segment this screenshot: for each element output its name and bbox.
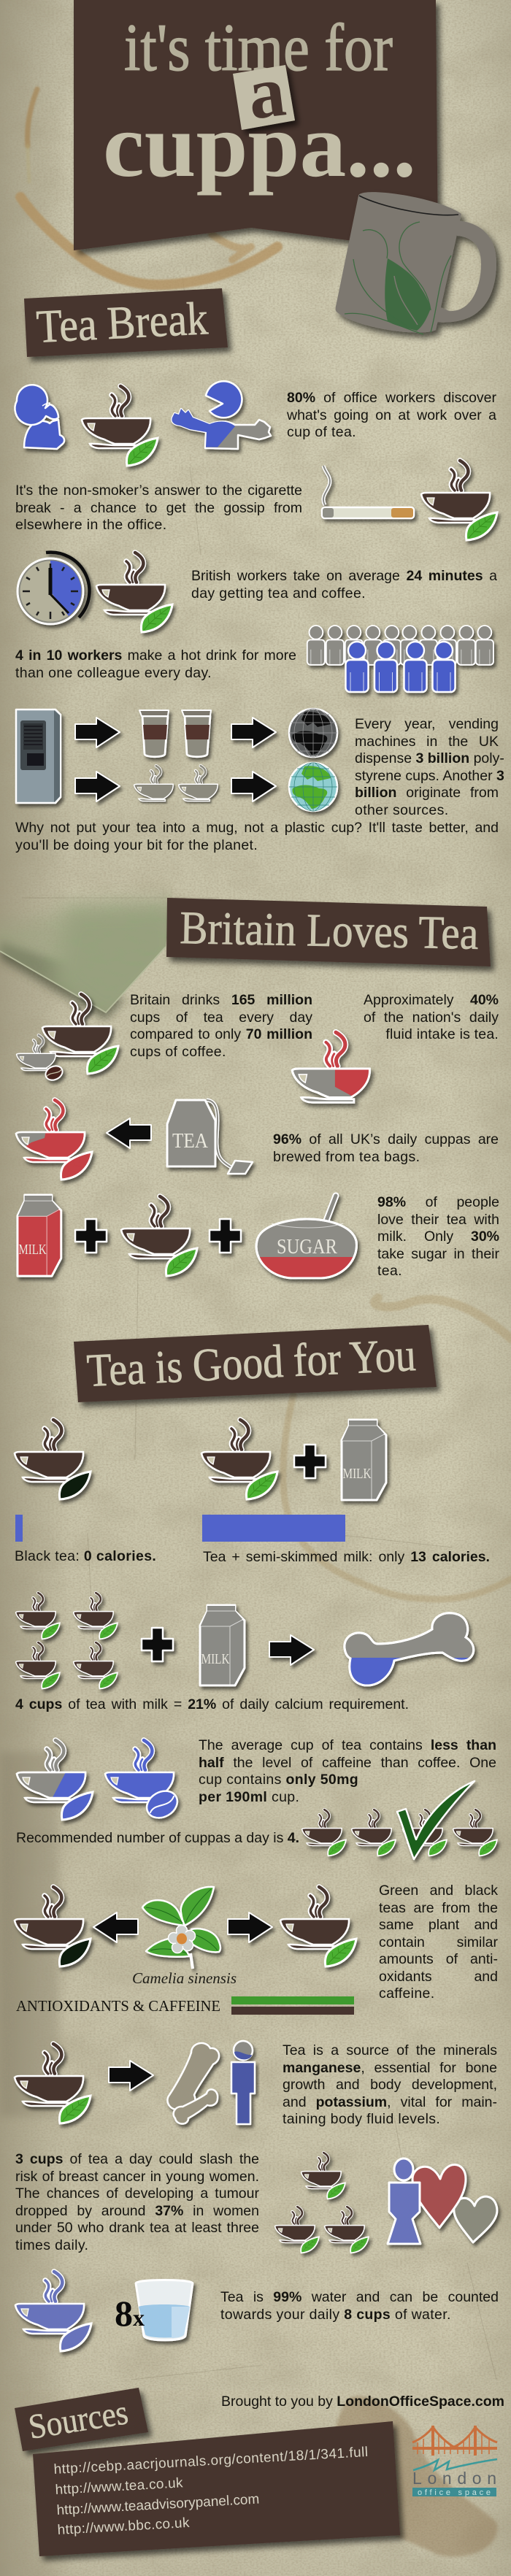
- heading banner: Tea Break: Tea Break: [35, 292, 209, 353]
- text: use a mug: Why not put your tea into a mug, not a plastic cup? It'll taste better, and: [15, 820, 499, 836]
- source url 2: http://www.tea.co.uk: [55, 2475, 184, 2498]
- text: breast cancer: dropped by around 37% in women: [15, 2203, 259, 2219]
- sources panel: [33, 2421, 400, 2556]
- logo: London Office Space: London: [412, 2469, 496, 2488]
- icon: listening colleague: [15, 385, 64, 449]
- text: non-smoker's answer: break - a chance to get the gossip from: [15, 499, 302, 515]
- text: 98 percent milk: love their tea with: [377, 1212, 499, 1228]
- text: green and black teas: same plant and: [379, 1917, 498, 1933]
- text: caffeine: [199, 1737, 496, 1804]
- icon: black tea cup: [15, 1420, 91, 1499]
- icon: woman and hearts: [388, 2158, 497, 2244]
- text: caffeine: The average cup of tea contains less than: [199, 1737, 496, 1753]
- text: 24 minutes: day getting tea and coffee.: [191, 585, 366, 601]
- icon: cup 40 percent red: [292, 1032, 374, 1102]
- title banner: [74, 0, 438, 252]
- text: breast cancer: under 50 who drank tea at least three: [15, 2220, 259, 2236]
- text: caffeine: half the level of caffeine than coffee. One: [199, 1755, 496, 1771]
- text: breast cancer: The chances of developing a tumour: [15, 2185, 259, 2202]
- icon: big tea cup vs small coffee: [17, 994, 118, 1083]
- text: 40 percent of fluid intake: Approximately 40%: [364, 992, 499, 1008]
- text: 165 million cups: Britain drinks 165 million: [130, 992, 312, 1008]
- text: use a mug: you'll be doing your bit for the planet.: [15, 837, 258, 853]
- icon: tea cup with milk: [201, 1420, 277, 1499]
- plus sign cups and milk: [142, 1628, 173, 1661]
- text: vending machines: billion originate from: [355, 785, 499, 801]
- icon: cigarette: [322, 466, 414, 518]
- icon: tea cup beside clock: [96, 553, 172, 632]
- text: brought to you by: Brought to you by LondonOfficeSpace.com: [221, 2394, 504, 2410]
- text: vending machines: Every year, vending: [355, 716, 499, 732]
- icon: healthy globe: [289, 763, 337, 811]
- logo: London Office Space: office space: [418, 2488, 491, 2497]
- text: 96 percent tea bags: brewed from tea bags.: [273, 1149, 420, 1165]
- text: 165 million cups: cups of coffee.: [130, 1044, 226, 1060]
- icon: body figure: [231, 2041, 255, 2124]
- icon: sugar bowl: SUGAR: [277, 1235, 338, 1258]
- heading banner: Tea is Good for You: Tea is Good for You: [85, 1329, 417, 1396]
- bar: black tea antioxidants: [231, 2007, 354, 2015]
- text: 96 percent tea bags: 96% of all UK’s daily cuppas are: [273, 1131, 499, 1147]
- text: black tea calories: Black tea: 0 calories.: [15, 1548, 156, 1564]
- text: green and black teas: teas are from the: [379, 1899, 498, 1915]
- source url 3: http://www.teaadvisorypanel.com: [56, 2492, 260, 2518]
- text: 98 percent milk: milk. Only 30%: [377, 1229, 499, 1245]
- plus sign milk and tea: [75, 1219, 107, 1253]
- arrow from tea bag to cup: [107, 1118, 151, 1148]
- text: green and black teas: Green and black: [379, 1883, 498, 1899]
- text: 99 percent water: Tea is 99% water and can be counted: [220, 2289, 499, 2305]
- plus sign tea and milk: [294, 1445, 326, 1478]
- mug illustration: [336, 192, 496, 334]
- text: green and black teas: caffeine.: [379, 1985, 435, 2002]
- arrow to green globe: [231, 772, 276, 801]
- text: 98 percent milk: 98% of people: [377, 1194, 499, 1210]
- text: green and black teas: contain similar: [379, 1934, 498, 1950]
- title line: it's time for: it's time for: [124, 10, 393, 85]
- icon: takeaway cup one: [139, 710, 169, 757]
- 8x label: 8x: [115, 2293, 145, 2334]
- coffee ring stain top: [20, 89, 277, 285]
- text: use a mug: [15, 820, 499, 853]
- arrow to china cups: [75, 772, 120, 801]
- text: 98 percent milk: [377, 1194, 499, 1279]
- text: 40 percent of fluid intake: [364, 992, 499, 1042]
- text: 24 minutes: British workers take on average 24 minutes a: [191, 568, 497, 584]
- icon: four recommended cups with tick: [302, 1781, 497, 1859]
- text: caffeine: cup contains only 50mg: [199, 1772, 358, 1788]
- text: vending machines: [355, 716, 504, 818]
- text: breast cancer: 3 cups of tea a day could slash the: [15, 2151, 259, 2167]
- title line: cuppa: cuppa...: [103, 96, 416, 196]
- text: caffeine: per 190ml cup.: [199, 1788, 299, 1804]
- text: breast cancer: risk of breast cancer in young women.: [15, 2168, 259, 2184]
- arrow to dark globe: [231, 718, 276, 747]
- text: calcium: 4 cups of tea with milk = 21% of daily calcium requirement.: [15, 1696, 409, 1712]
- icon: polluted globe: [289, 709, 337, 757]
- text: vending machines: dispense 3 billion poly-: [355, 750, 504, 766]
- arrow to black tea: [93, 1912, 138, 1942]
- icon: china cup two: [179, 766, 218, 801]
- heading banner: Sources: Sources: [26, 2393, 131, 2447]
- text: recommended cuppas: Recommended number of cuppas a day is 4.: [16, 1830, 299, 1846]
- text: 4 in 10 workers: [15, 647, 296, 680]
- icon: glass of water: [136, 2280, 193, 2340]
- text: 80 percent of office workers: cup of tea.: [287, 424, 356, 440]
- text: 165 million cups: cups of tea every day: [130, 1009, 312, 1025]
- text: green and black teas: [379, 1883, 498, 2002]
- text: 80 percent of office workers: [287, 390, 496, 440]
- icon: talking colleague: [172, 381, 271, 449]
- icon: tea cup with milk and sugar: [121, 1196, 197, 1276]
- text: breast cancer: [15, 2151, 259, 2253]
- text: minerals: manganese, essential for bone: [283, 2060, 497, 2076]
- arrow to green tea: [228, 1912, 272, 1942]
- icon: water tea cup: [15, 2272, 91, 2351]
- text: green and black teas: amounts of anti-: [379, 1951, 498, 1967]
- icon: black tea cup from plant: [15, 1887, 91, 1966]
- icon: milk carton for calcium: [200, 1605, 245, 1685]
- bar: 0 calories: [15, 1515, 23, 1542]
- text: minerals: growth and body development,: [283, 2077, 497, 2093]
- arrow to bones and body: [109, 2061, 153, 2091]
- icon: tea cup beside cigarette: [421, 461, 497, 540]
- text: vending machines: other sources.: [355, 801, 448, 818]
- text: green and black teas: oxidants and: [379, 1968, 498, 1984]
- icon: red cup 96 percent: [15, 1100, 92, 1180]
- text: 98 percent milk: take sugar in their: [377, 1245, 499, 1261]
- icon: camelia sinensis plant: [142, 1887, 220, 1969]
- text: 80 percent of office workers: what's going on at work over a: [287, 407, 496, 423]
- logo: London Office Space: [412, 2426, 497, 2497]
- text: 99 percent water: towards your daily 8 cups of water.: [220, 2307, 451, 2323]
- coffee stain bottom right: [333, 2396, 497, 2557]
- text: minerals: taining body fluid levels.: [283, 2111, 440, 2127]
- title tile: a: a: [243, 50, 290, 135]
- icon: tea cup minerals: [15, 2044, 91, 2123]
- icon: bones: [167, 2043, 219, 2124]
- coffee ring stain middle: [283, 1298, 511, 1599]
- text: 24 minutes: [191, 568, 497, 601]
- icon: bone 21 percent filled: [345, 1613, 474, 1685]
- icon: four cups of tea: [16, 1593, 118, 1688]
- icon: red milk carton: [18, 1195, 61, 1276]
- bar: 13 calories: [202, 1515, 345, 1542]
- text: 4 in 10 workers: than one colleague every day.: [15, 664, 212, 680]
- text: vending machines: styrene cups. Another 3: [355, 768, 504, 784]
- text: 98 percent milk: tea.: [377, 1263, 402, 1279]
- icon: tea cup with leaf: [82, 386, 158, 466]
- text: minerals: [283, 2042, 497, 2127]
- source url 4: http://www.bbc.co.uk: [57, 2515, 190, 2538]
- text: 80 percent of office workers: 80% of office workers discover: [287, 390, 496, 406]
- text: 99 percent water: [220, 2289, 499, 2323]
- icon: grey milk carton: [342, 1420, 386, 1500]
- text: non-smoker's answer: [15, 482, 302, 533]
- text: breast cancer: times daily.: [15, 2237, 88, 2253]
- text: 165 million cups: [130, 992, 312, 1060]
- text: non-smoker's answer: It's the non-smoker’s answer to the cigarette: [15, 482, 302, 499]
- icon: green tea cup from plant: [280, 1887, 356, 1966]
- icon: tea bag: TEA: [172, 1130, 209, 1153]
- text: tea with milk calories: Tea + semi-skimmed milk: only 13 calories.: [203, 1549, 490, 1565]
- text: 4 in 10 workers: 4 in 10 workers make a hot drink for more: [15, 647, 296, 664]
- text: minerals: and potassium, vital for main-: [283, 2094, 497, 2110]
- icon: clock: [18, 553, 89, 624]
- icon: vending machine: [16, 710, 61, 803]
- text: 40 percent of fluid intake: of the nation's daily: [364, 1009, 499, 1025]
- antioxidants label: ANTIOXIDANTS & CAFFEINE: [16, 1997, 220, 2015]
- tea bag texture: [0, 893, 171, 1023]
- text: non-smoker's answer: elsewhere in the office.: [15, 517, 166, 533]
- plus sign tea and sugar: [210, 1219, 241, 1253]
- bar: green tea antioxidants: [231, 1996, 354, 2004]
- source url 1: http://cebp.aacrjournals.org/content/18/1/341.full: [53, 2445, 369, 2477]
- icon: china cup one: [134, 766, 173, 801]
- icon: coffee cup full caffeine: [105, 1740, 182, 1823]
- text: 165 million cups: compared to only 70 million: [130, 1026, 312, 1042]
- icon: tea cup half caffeine: [17, 1740, 93, 1820]
- icon: three cups: [275, 2153, 369, 2253]
- icon: tea bag: [167, 1100, 253, 1174]
- icon: sugar bowl: [256, 1196, 356, 1278]
- icon: takeaway cup two: [182, 710, 211, 757]
- text: 96 percent tea bags: [273, 1131, 499, 1165]
- heading banner: Britain Loves Tea: Britain Loves Tea: [180, 901, 479, 959]
- plant caption: Camelia sinensis: [132, 1969, 237, 1987]
- icon: crowd of workers: [307, 626, 493, 692]
- arrow to bone: [269, 1635, 314, 1665]
- text: 40 percent of fluid intake: fluid intake is tea.: [385, 1026, 499, 1042]
- text: vending machines: machines in the UK: [355, 733, 499, 749]
- text: minerals: Tea is a source of the minerals: [283, 2042, 497, 2058]
- arrow to takeaway cups: [75, 718, 120, 747]
